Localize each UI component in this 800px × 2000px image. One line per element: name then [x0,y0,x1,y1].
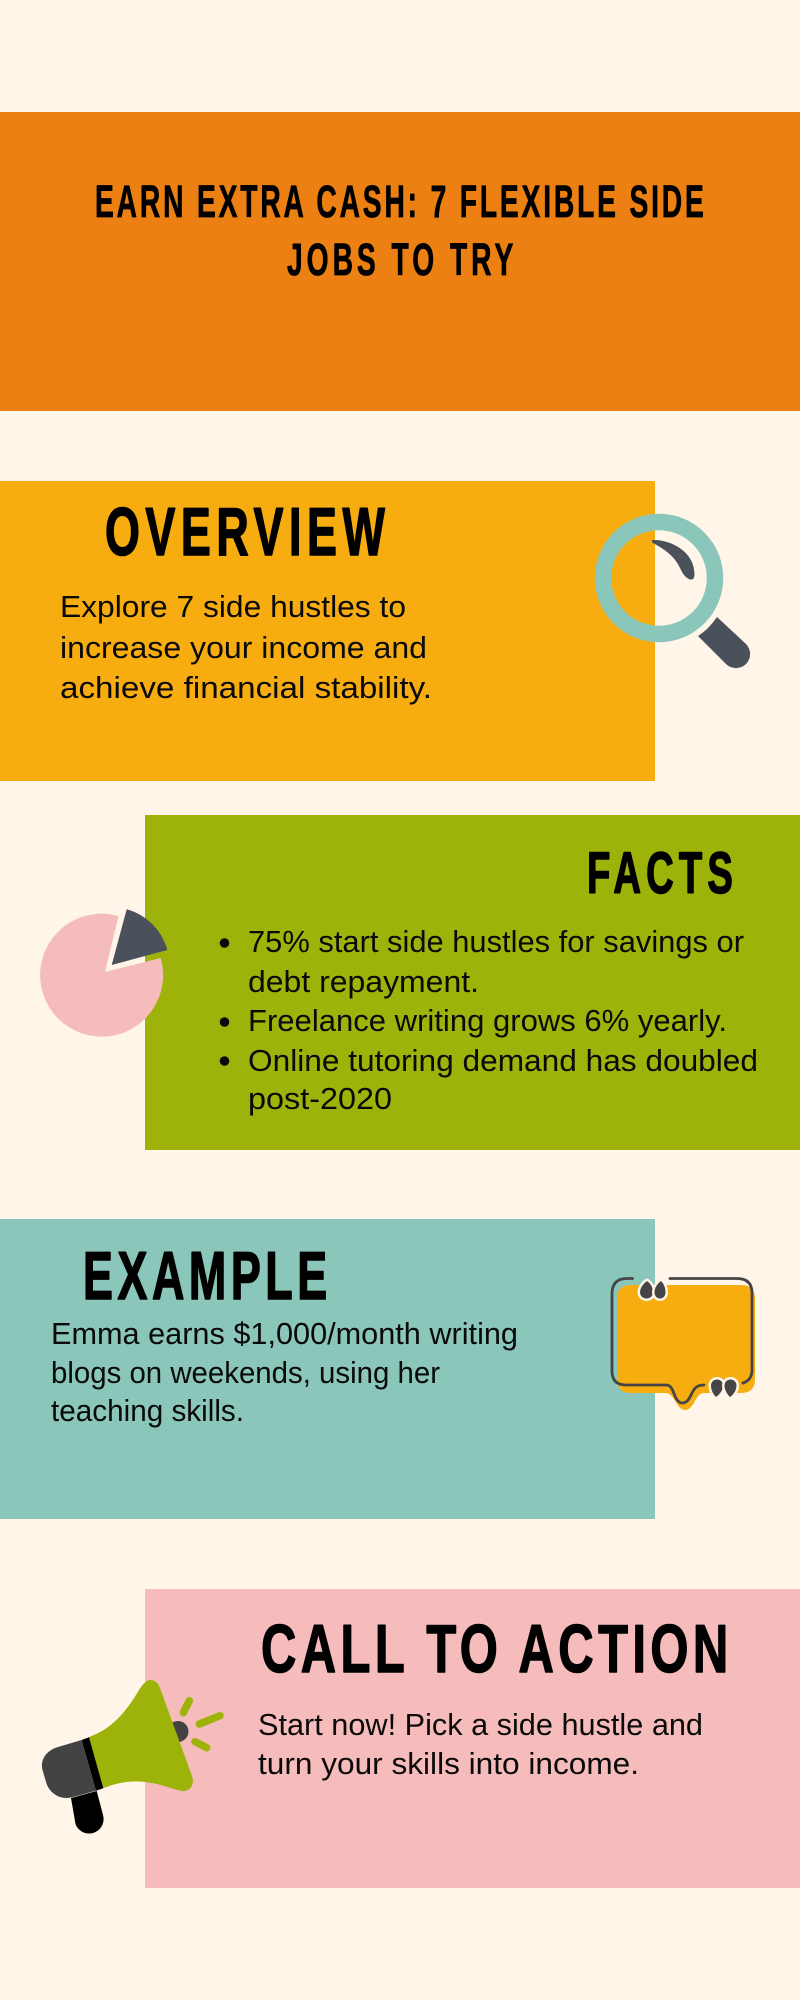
text: example body: Emma earns $1,000/month writing [51,1316,518,1351]
text: call to action body: turn your skills into income. [258,1746,639,1781]
title: EARN EXTRA CASH: 7 FLEXIBLE SIDE [95,177,704,228]
list: facts bullets: 75% start side hustles for savings or [248,924,744,959]
text: example body [51,1316,518,1428]
list: facts bullets: debt repayment. [248,964,479,999]
text: overview body: increase your income and [60,630,427,665]
panel: call to action [42,1589,800,1888]
panel: overview [0,481,750,781]
list: facts bullets: post-2020 [248,1081,392,1116]
title [95,177,704,286]
icon: megaphone [42,1680,220,1834]
list: facts bullets: Freelance writing grows 6% yearly. [248,1003,727,1038]
panel: facts [40,815,800,1150]
text: call to action body: Start now! Pick a side hustle and [258,1707,703,1742]
text: overview body: Explore 7 side hustles to [60,589,406,624]
heading: call to action: CALL TO ACTION [261,1610,728,1687]
list: facts bullets: Online tutoring demand has doubled [248,1043,758,1078]
text: overview body: achieve financial stability. [60,670,432,705]
title: JOBS TO TRY [287,235,513,286]
heading: overview: OVERVIEW [105,495,385,570]
panel: example [0,1219,755,1519]
panel: title banner [0,112,800,411]
text: example body: blogs on weekends, using her [51,1355,440,1390]
text: example body: teaching skills. [51,1393,244,1428]
heading: example: EXAMPLE [83,1239,327,1314]
icon: magnifying glass [603,522,750,668]
icon: pie chart [40,909,167,1037]
text: call to action body [258,1707,703,1781]
list: facts bullets [220,924,758,1116]
text: overview body [60,589,432,705]
heading: facts: FACTS [587,842,733,906]
icon: speech bubble [612,1278,755,1410]
